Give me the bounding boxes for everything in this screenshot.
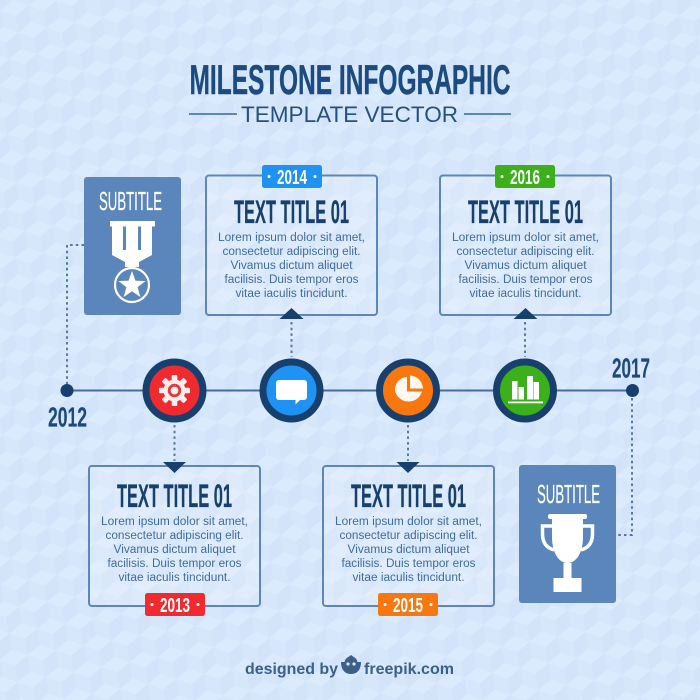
pointer arrow [163, 462, 186, 473]
text block [218, 232, 365, 300]
heading: TEXT TITLE 01 [117, 478, 232, 514]
footer credit [245, 655, 454, 678]
panel: medal subtitle [84, 177, 181, 315]
timeline start dot [60, 384, 74, 397]
pointer arrow [514, 308, 538, 319]
heading: TEXT TITLE 01 [351, 478, 466, 514]
connector: 2012 to medal panel [67, 245, 84, 384]
connector: 2016 stem [524, 322, 526, 357]
panel: 2014 [206, 165, 377, 319]
year badge: 2015: 2015 [393, 595, 423, 617]
medal subtitle text: SUBTITLE [99, 186, 162, 216]
connector: 2013 stem [174, 425, 176, 461]
icon node: pie chart [380, 362, 436, 419]
icon: trophy [542, 514, 592, 592]
text block: Lorem ipsum dolor sit amet, [335, 516, 482, 528]
text block: facilisis. Duis tempor eros [458, 274, 593, 286]
year badge: 2014: 2014 [277, 167, 308, 189]
connector: 2014 stem [290, 322, 292, 357]
footer credit: designed by [245, 661, 338, 678]
text block: consectetur adipiscing elit. [340, 530, 478, 542]
timeline axis [67, 390, 632, 392]
icon: medal [110, 221, 155, 302]
icon node: speech bubble [263, 362, 320, 419]
text block [335, 516, 482, 584]
text block: Vivamus dictum aliquet [464, 260, 587, 272]
text block: vitae iaculis tincidunt. [352, 572, 464, 584]
subtitle: template vector: TEMPLATE VECTOR [241, 102, 458, 127]
connector: 2017 to trophy panel [616, 398, 632, 535]
text block: Vivamus dictum aliquet [348, 544, 470, 556]
year badge: 2015 [378, 593, 438, 617]
timeline end dot [626, 384, 639, 397]
panel: 2015 [323, 462, 494, 617]
year badge: 2013 [145, 593, 205, 617]
trophy subtitle text: SUBTITLE [537, 479, 600, 509]
text block: Lorem ipsum dolor sit amet, [218, 232, 365, 244]
text block: vitae iaculis tincidunt. [236, 288, 348, 300]
icon node: bar chart [496, 362, 554, 419]
year badge: 2016: 2016 [510, 167, 540, 189]
heading: TEXT TITLE 01 [234, 194, 349, 230]
panel: 2013 [89, 462, 260, 617]
text block: facilisis. Duis tempor eros [342, 558, 476, 570]
heading: TEXT TITLE 01 [468, 194, 583, 230]
text block [452, 232, 599, 300]
panel: 2016 [440, 165, 611, 319]
text block: vitae iaculis tincidunt. [118, 572, 230, 584]
icon node: gear [146, 362, 203, 419]
text block [101, 516, 248, 584]
text block: facilisis. Duis tempor eros [224, 274, 359, 286]
text block: consectetur adipiscing elit. [106, 530, 243, 542]
connector: 2015 stem [407, 425, 409, 461]
text block: Vivamus dictum aliquet [114, 544, 236, 556]
year badge: 2014 [262, 165, 322, 189]
text block: Lorem ipsum dolor sit amet, [101, 516, 248, 528]
year badge: 2013: 2013 [160, 595, 190, 617]
panel: trophy subtitle [519, 465, 616, 603]
text block: vitae iaculis tincidunt. [470, 288, 582, 300]
year label: 2012: 2012 [48, 402, 87, 432]
year label: 2017: 2017 [612, 352, 650, 384]
text block: consectetur adipiscing elit. [222, 246, 360, 258]
pointer arrow [396, 462, 420, 473]
pointer arrow [280, 308, 304, 319]
text block: Lorem ipsum dolor sit amet, [452, 232, 599, 244]
text block: facilisis. Duis tempor eros [108, 558, 242, 570]
icon: freepik logo [341, 655, 361, 674]
text block: consectetur adipiscing elit. [456, 246, 594, 258]
year badge: 2016 [495, 165, 555, 189]
text block: Vivamus dictum aliquet [230, 260, 353, 272]
footer credit: freepik.com [364, 661, 454, 678]
